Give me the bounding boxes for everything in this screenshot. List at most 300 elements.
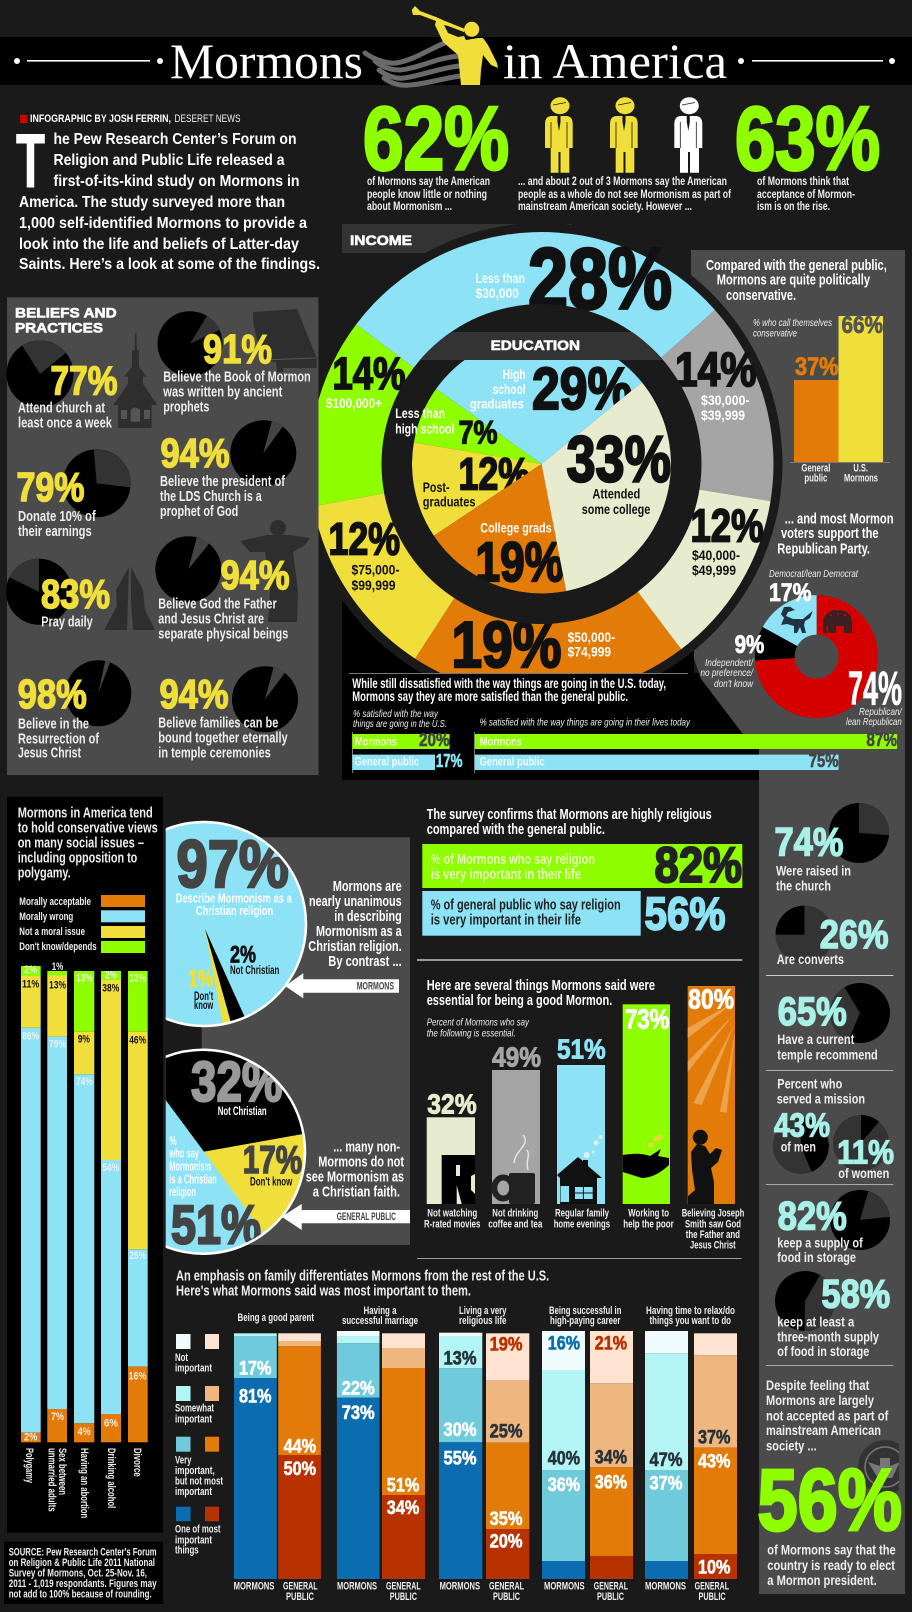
bar: polygamy	[21, 964, 41, 1444]
education labels: graduates	[470, 396, 524, 412]
stat 62%: people know little or nothing	[367, 187, 487, 201]
chart: being a good parent: Being a good parent	[238, 1312, 314, 1324]
party heading	[777, 510, 894, 558]
stat: 26% converts: 26%	[820, 913, 888, 957]
arrow: general public: GENERAL PUBLIC	[337, 1211, 396, 1223]
stat: served a mission	[773, 1076, 894, 1181]
stat: 94% families: in temple ceremonies	[158, 744, 271, 761]
legend: important	[175, 1413, 212, 1425]
title	[170, 33, 727, 89]
bar: sex between unmarried adults: 7%	[51, 1411, 64, 1423]
chart: very religious life: 20%	[490, 1532, 523, 1553]
chart: high-paying career: 40%	[548, 1448, 580, 1469]
party labels: 9%	[735, 631, 764, 659]
income labels	[326, 232, 764, 681]
legend: Very	[175, 1454, 192, 1466]
rotated bar labels: Divorce	[131, 1448, 143, 1477]
panel: right column statistics	[758, 803, 912, 1588]
bar: joseph smith vision: 80%	[688, 983, 734, 1014]
chart: successful marriage: GENERAL	[386, 1580, 421, 1592]
caption: mainstream	[518, 174, 732, 213]
stat: 83% prayer	[6, 559, 110, 631]
bar: mormons 82%: % of Mormons who say religion	[431, 851, 595, 868]
note	[427, 1017, 530, 1040]
stat: 94% families	[158, 666, 298, 761]
stat: 74% raised in the church: Were raised in	[776, 862, 851, 878]
stat: 77% church: Attend church at	[18, 399, 105, 416]
icon: hand	[623, 1134, 669, 1178]
party heading: voters support the	[781, 525, 879, 542]
party labels	[700, 568, 903, 728]
text: despite feeling: Mormons are largely	[766, 1392, 874, 1408]
bar: help the poor: help the poor	[623, 1218, 674, 1230]
satisfaction notes: things are going in the U.S.	[353, 718, 447, 730]
bar: drinking alcohol: 38%	[102, 983, 119, 995]
pie: general public view: Mormonism	[169, 1159, 211, 1174]
chart: high-paying career: 34%	[595, 1447, 627, 1468]
income labels: 14%	[675, 344, 756, 397]
bar chart: satisfaction in U.S.: Mormons	[355, 736, 397, 748]
legend: Not a moral issue	[19, 926, 85, 938]
heading: polygamy.	[18, 865, 71, 882]
caption: mainstream: mainstream American society. However ...	[518, 199, 692, 213]
pie: general public view: 32%	[191, 1050, 283, 1114]
education labels: graduates	[423, 494, 476, 510]
bar: sex between unmarried adults: 1%	[52, 961, 63, 973]
text: nearly unanimous	[308, 878, 402, 970]
panel: right gray backdrop	[691, 250, 905, 1594]
chart: education pie: 7%	[458, 414, 498, 450]
bar: coffee and tea: Not drinking	[492, 1208, 538, 1220]
chart: being a good parent: 81%	[239, 1387, 272, 1408]
chart: successful marriage: successful marriage	[342, 1315, 418, 1327]
text: nearly unanimous: Mormonism as a	[316, 923, 402, 940]
bar: coffee and tea	[488, 1042, 543, 1230]
header banner	[0, 6, 912, 89]
stat: 65% temple recommend: 65%	[778, 990, 847, 1034]
source note	[4, 1542, 163, 1604]
bar: R-rated movies: 32%	[427, 1088, 477, 1119]
stat: served a mission: served a mission	[777, 1091, 865, 1107]
chart: very religious life: 25%	[490, 1421, 523, 1442]
chart: education pie: 12%	[458, 448, 530, 500]
chart: very religious life: Living a very	[459, 1305, 507, 1317]
chart: high-paying career	[542, 1305, 633, 1603]
bar: R-rated movies: Not watching	[427, 1208, 477, 1220]
bar: polygamy: 2%	[24, 1432, 37, 1444]
bar: sex between unmarried adults: 79%	[49, 1039, 66, 1051]
icon: donkey	[781, 607, 813, 633]
income labels: 28%	[528, 232, 672, 328]
chart: being a good parent	[234, 1312, 321, 1603]
stat: 91% book of mormon: Believe the Book of Mormon	[163, 369, 311, 386]
chart: high-paying career: 21%	[595, 1333, 627, 1354]
bar: divorce: 25%	[129, 1250, 146, 1262]
bar: general public 56%	[422, 888, 726, 940]
chart: high-paying career: GENERAL	[594, 1580, 628, 1592]
text: nearly unanimous: Mormons are	[333, 878, 402, 895]
chart: very religious life: MORMONS	[440, 1580, 480, 1592]
income labels: $74,999	[568, 644, 611, 660]
education labels: high school	[395, 420, 454, 436]
chart: time to relax: 43%	[698, 1451, 731, 1472]
bar chart: conservative: 66%	[842, 312, 883, 339]
income labels: Less than	[476, 270, 525, 286]
panel: social issues	[7, 797, 163, 1533]
text: many non-mormons: see Mormonism as	[306, 1169, 404, 1186]
bar: joseph smith vision: Believing Joseph	[682, 1208, 744, 1220]
stat: 82% food storage: keep a supply of	[777, 1234, 863, 1250]
chart: being a good parent: PUBLIC	[286, 1591, 314, 1603]
chart: time to relax: 37%	[650, 1473, 683, 1494]
stat: 94% godhead: 94%	[220, 552, 290, 598]
icon: house	[557, 1135, 603, 1204]
pie: general public view	[166, 1048, 306, 1255]
chart: successful marriage: 73%	[342, 1403, 375, 1424]
rotated bar labels: Having an abortion	[78, 1448, 90, 1518]
byline: DESERET NEWS	[174, 113, 240, 125]
stat 62%: 62%	[363, 90, 509, 190]
heading: essential for being a good Mormon.	[427, 992, 612, 1009]
title rules	[14, 58, 895, 64]
stat: 83% prayer: 83%	[41, 571, 110, 617]
bar: polygamy: 11%	[22, 978, 39, 990]
pie: mormons describe mormonism: 1%	[188, 966, 213, 993]
education labels: High	[503, 366, 526, 382]
bar: family home evenings: 51%	[557, 1033, 606, 1064]
bar: sex between unmarried adults: 13%	[49, 979, 66, 991]
bar: abortion: 4%	[78, 1426, 91, 1438]
stat: 56% president: a Mormon president.	[767, 1572, 877, 1588]
bar chart: conservative: U.S.	[853, 463, 868, 475]
bar: R-rated movies: R-rated movies	[424, 1218, 480, 1230]
caption: mainstream: ... and about 2 out of 3 Mormons say the American	[518, 174, 727, 188]
intro paragraph: first-of-its-kind study on Mormons in	[54, 173, 300, 190]
bar: R-rated movies	[424, 1088, 480, 1230]
chart: high-paying career: 36%	[595, 1472, 627, 1493]
party labels: don't know	[714, 678, 754, 690]
stat: 98% resurrection: Jesus Christ	[18, 745, 81, 762]
heading	[706, 257, 887, 304]
chart: high-paying career: 16%	[548, 1333, 580, 1354]
stat: 77% church: least once a week	[18, 414, 112, 431]
heading: to hold conservative views	[18, 820, 158, 837]
bar: coffee and tea: coffee and tea	[488, 1218, 543, 1230]
icon: angel moroni with trumpet	[412, 6, 498, 85]
note: the following is essential.	[427, 1028, 516, 1040]
heading	[176, 1268, 549, 1300]
stat: 65% temple recommend: Have a current	[777, 1031, 855, 1047]
chart: successful marriage: MORMONS	[337, 1580, 377, 1592]
stat: 58% three month supply: 58%	[822, 1272, 890, 1316]
education labels: some college	[582, 501, 650, 517]
rotated bar labels: Sex between	[56, 1448, 68, 1495]
stat: 74% raised in the church: the church	[776, 877, 831, 893]
source note: on Religion & Public Life 2011 National	[9, 1557, 155, 1569]
source note: 2011 - 1,019 respondants. Figures may	[9, 1578, 157, 1590]
bar: polygamy: 2%	[24, 964, 37, 976]
stat 63%: ism is on the rise.	[757, 199, 830, 213]
stat: 94% families: Believe families can be	[158, 714, 278, 731]
heading: on many social issues –	[18, 835, 144, 852]
chart: being a good parent: 50%	[284, 1459, 316, 1480]
chart: education pie	[380, 304, 704, 624]
stat: 56% president	[758, 1452, 902, 1588]
income label: INCOME	[350, 232, 412, 248]
note: conservative	[753, 328, 797, 340]
bar: mormons 82%	[422, 837, 742, 893]
legend: important	[175, 1534, 212, 1546]
stat: 79% tithing	[16, 449, 131, 540]
text: despite feeling: Despite feeling that	[766, 1377, 870, 1393]
chart: very religious life: 13%	[444, 1348, 477, 1369]
bar: abortion: 9%	[78, 1034, 90, 1046]
stat: served a mission: Percent who	[777, 1076, 842, 1092]
education labels: Attended	[592, 486, 640, 502]
legend: important	[175, 1486, 212, 1498]
bar: sex between unmarried adults	[47, 961, 67, 1442]
chart: education pie: 33%	[566, 422, 671, 496]
chart: being a good parent: 17%	[239, 1358, 272, 1379]
bar chart: satisfaction in U.S.	[352, 730, 462, 773]
stat: 79% tithing: 79%	[16, 464, 84, 510]
panel: beliefs and practices	[6, 297, 318, 775]
light rays	[688, 1002, 735, 1113]
chart: being a good parent: GENERAL	[283, 1580, 318, 1592]
heading: including opposition to	[18, 850, 137, 867]
heading	[18, 805, 158, 882]
bar: coffee and tea: 49%	[492, 1042, 541, 1073]
bar chart: satisfaction in U.S.: 20%	[419, 730, 450, 750]
chart: successful marriage: PUBLIC	[390, 1591, 417, 1603]
note	[753, 317, 833, 340]
bar: divorce: 46%	[129, 1034, 146, 1046]
chart: time to relax: GENERAL	[695, 1580, 729, 1592]
bar: general public 56%: 56%	[644, 888, 726, 940]
icon: praying hands	[104, 567, 155, 630]
bar: abortion: 13%	[76, 973, 93, 985]
chart: time to relax: things you want to do	[650, 1315, 731, 1327]
income labels: $40,000-	[692, 547, 740, 563]
education labels: school	[493, 381, 526, 397]
intro paragraph: look into the life and beliefs of Latter-day	[19, 236, 299, 253]
icon: book	[253, 309, 317, 372]
panel: highly religious	[422, 806, 742, 940]
chart: very religious life: PUBLIC	[493, 1591, 520, 1603]
bar: joseph smith vision: Jesus Christ	[690, 1239, 736, 1251]
stat: 94% godhead: separate physical beings	[158, 625, 288, 642]
bar: help the poor	[623, 1003, 674, 1230]
title: in America	[503, 33, 727, 89]
legend: important,	[175, 1465, 215, 1477]
icon: kneeling figure	[688, 1130, 722, 1204]
income labels: $100,000+	[326, 395, 382, 411]
text: many non-mormons: a Christian faith.	[313, 1184, 400, 1201]
stat: 94% godhead	[155, 536, 290, 642]
income labels: $30,000-	[701, 392, 750, 408]
bar: joseph smith vision: the Father and	[686, 1229, 740, 1241]
chart: very religious life: religious life	[459, 1315, 506, 1327]
stat: 58% three month supply	[775, 1271, 890, 1359]
panel: political conservatism	[700, 257, 903, 728]
legend	[175, 1334, 223, 1557]
bar chart: conservative: General	[801, 463, 830, 475]
text: despite feeling: society ...	[766, 1438, 817, 1454]
stat: 83% prayer: Pray daily	[41, 614, 93, 631]
bar: family home evenings	[554, 1033, 610, 1230]
person 1	[545, 97, 573, 173]
legend: Morally wrong	[19, 911, 73, 923]
legend: important	[175, 1363, 212, 1375]
bar: drinking alcohol: 2%	[105, 969, 117, 981]
icon: church	[113, 333, 157, 428]
bar: family home evenings: Regular family	[555, 1208, 610, 1220]
bar: divorce: 13%	[129, 973, 146, 985]
chart: time to relax: MORMONS	[645, 1580, 686, 1592]
bar chart: satisfaction in U.S.: General public	[354, 757, 419, 769]
chart: education pie: 29%	[532, 356, 632, 422]
chart: very religious life: 30%	[444, 1420, 477, 1441]
income labels: 12%	[690, 500, 764, 552]
heading: Here are several things Mormons said were	[427, 977, 655, 994]
stat 62%	[363, 90, 509, 213]
stat: 82% food storage: food in storage	[777, 1249, 856, 1265]
pie: general public view: who say	[169, 1146, 199, 1161]
text: nearly unanimous: nearly unanimous	[309, 893, 402, 910]
party labels: Independent/	[705, 657, 754, 669]
heading: compared with the general public.	[427, 821, 605, 838]
satisfaction notes: % satisfied with the way things are going in their lives today	[480, 717, 691, 729]
pie: mormons describe mormonism: Not Christian	[230, 965, 279, 977]
stat: 94% families: 94%	[160, 671, 228, 717]
stat: 94% president: the LDS Church is a	[160, 488, 262, 505]
chart: successful marriage: 22%	[342, 1378, 375, 1399]
stat: 94% president: Believe the president of	[160, 473, 286, 490]
education band: EDUCATION	[491, 337, 580, 353]
chart: high-paying career: PUBLIC	[597, 1591, 624, 1603]
income labels: $75,000-	[352, 561, 400, 577]
arrow: mormons	[285, 973, 399, 998]
text: despite feeling: mainstream American	[766, 1422, 881, 1438]
income labels: 14%	[332, 348, 406, 399]
stat: 26% converts: Are converts	[777, 951, 844, 967]
arrow: general public	[282, 1204, 410, 1230]
bar: help the poor: Working to	[628, 1208, 669, 1220]
chart: time to relax: 10%	[698, 1557, 731, 1578]
heading: BELIEFS AND	[15, 304, 117, 320]
satisfaction heading	[352, 676, 666, 704]
panel: satisfaction backdrop upper	[342, 602, 694, 673]
chart: high-paying career: 36%	[548, 1475, 580, 1496]
stat: 79% tithing: their earnings	[18, 523, 92, 540]
panel: satisfaction	[342, 673, 897, 780]
stat: 91% book of mormon: 91%	[203, 326, 272, 372]
pie: general public view: 51%	[171, 1194, 261, 1256]
income labels: 19%	[452, 608, 562, 681]
text: many non-mormons: Mormons do not	[318, 1154, 404, 1171]
stat: 58% three month supply: three-month supply	[777, 1328, 879, 1344]
chart: successful marriage	[337, 1305, 425, 1603]
panel: christian religion	[166, 820, 410, 1255]
intro paragraph	[19, 131, 320, 273]
stat: 91% book of mormon: prophets	[163, 399, 209, 416]
stat: 94% godhead: Believe God the Father	[158, 595, 277, 612]
bar: family home evenings: home evenings	[554, 1218, 610, 1230]
satisfaction heading: Mormons say they are more satisfied than the general public.	[352, 689, 628, 704]
pie: general public view: 17%	[243, 1139, 302, 1182]
chart: very religious life	[439, 1305, 529, 1603]
intro text block	[16, 113, 320, 273]
heading: An emphasis on family differentiates Mormons from the rest of the U.S.	[176, 1268, 549, 1285]
legend: things	[175, 1545, 199, 1557]
heading	[427, 977, 655, 1009]
source note: SOURCE: Pew Research Center's Forum	[9, 1547, 157, 1559]
bar chart: satisfaction in lives	[474, 730, 897, 773]
legend: but not most	[175, 1475, 223, 1487]
pie: mormons describe mormonism: know	[194, 1000, 213, 1012]
icon: three people	[545, 97, 702, 173]
intro paragraph: he Pew Research Center’s Forum on	[54, 131, 296, 148]
drop cap: T	[16, 119, 45, 204]
bar chart: satisfaction in U.S.: 17%	[436, 751, 462, 771]
text: many non-mormons	[306, 1139, 404, 1201]
intro paragraph: Religion and Public Life released a	[54, 152, 285, 169]
chart: time to relax	[645, 1305, 737, 1603]
pie: women 11%	[833, 1115, 894, 1181]
income labels: $99,999	[352, 577, 396, 593]
byline: INFOGRAPHIC BY JOSH FERRIN,	[30, 113, 171, 125]
stat: 65% temple recommend	[777, 983, 890, 1063]
stat: 91% book of mormon: was written by ancient	[163, 384, 282, 401]
stat: 98% resurrection: Resurrection of	[18, 730, 100, 747]
stat: 58% three month supply: keep at least a	[777, 1313, 854, 1329]
education labels: Less than	[395, 405, 445, 421]
heading: Mormons in America tend	[18, 805, 153, 822]
stat: 82% food storage: 82%	[778, 1194, 847, 1238]
chart: very religious life: 19%	[490, 1335, 523, 1356]
stat: 94% godhead: and Jesus Christ are	[158, 610, 264, 627]
text: despite feeling	[766, 1377, 889, 1454]
bar chart: conservative	[790, 312, 890, 485]
bar chart: satisfaction in lives: 75%	[809, 751, 838, 771]
chart: being a good parent: 44%	[284, 1437, 316, 1458]
bar: joseph smith vision	[682, 983, 744, 1251]
pie: men 43%	[773, 1106, 830, 1174]
stat: 82% food storage	[777, 1190, 890, 1265]
bar: help the poor: 73%	[625, 1003, 669, 1034]
stat: 94% families: bound together eternally	[158, 729, 288, 746]
heading: PRACTICES	[15, 319, 103, 335]
bar: drinking alcohol: 6%	[104, 1418, 118, 1430]
pie: men 43%: of men	[781, 1138, 816, 1154]
note: % who call themselves	[753, 317, 833, 329]
heading	[15, 304, 117, 335]
pie: women 11%: of women	[838, 1165, 889, 1181]
bar chart: satisfaction in lives: Mormons	[480, 736, 522, 748]
stat: 98% resurrection	[18, 660, 131, 762]
stat 62%: about Mormonism ...	[367, 199, 452, 213]
stat: 65% temple recommend: temple recommend	[777, 1047, 878, 1063]
chart: education pie: 19%	[476, 530, 564, 593]
bar: abortion: 74%	[76, 1076, 93, 1088]
icon: presidential seal	[858, 1440, 899, 1494]
stat: 26% converts	[776, 906, 888, 967]
source note: Survey of Mormons, Oct. 25-Nov. 16,	[9, 1568, 147, 1580]
education band	[420, 332, 663, 360]
icon: letter R	[442, 1155, 475, 1204]
rotated bar labels: Polygamy	[23, 1448, 35, 1484]
satisfaction notes: % satisfied with the way	[353, 708, 439, 720]
